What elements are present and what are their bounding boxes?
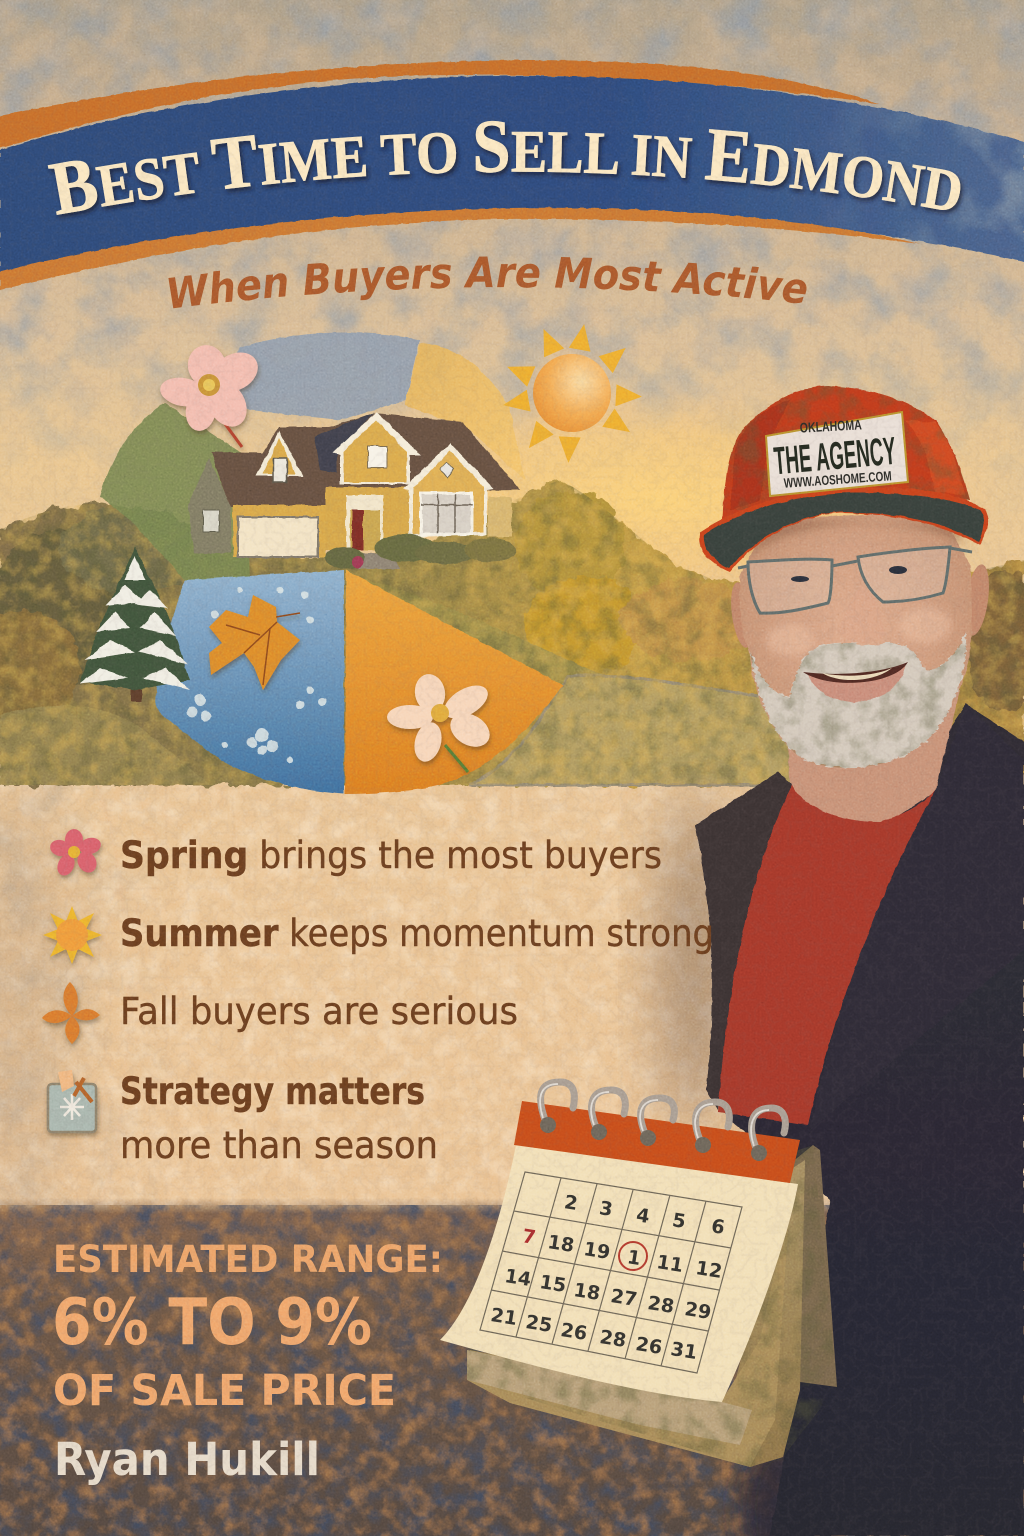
Strategy bullet: Strategy matters [120,1070,425,1113]
hat licence plate: THE AGENCY [772,430,898,483]
Strategy bullet second line: more than season [120,1124,438,1167]
house left wing [188,458,231,553]
house main roof [211,413,520,507]
calendar dates: 19 [582,1238,612,1264]
calendar dates: 25 [524,1311,554,1337]
house dark roof [314,412,374,473]
icon: fall leaf [42,982,100,1044]
calendar dates: 18 [546,1231,576,1257]
summer flower [387,672,496,772]
nose [838,585,885,643]
calendar dates: 26 [559,1319,589,1345]
neck [786,690,960,828]
calendar red header [514,1101,800,1183]
calendar dates: 28 [646,1292,676,1318]
snowy pine tree [80,547,190,702]
wheel quadrant: winter blue [155,570,344,794]
calendar dates [489,1191,726,1364]
jacket [695,704,1024,1536]
calendar dates: 28 [598,1326,628,1352]
banner top orange brush stroke [0,60,880,148]
house right gable [403,443,494,537]
calendar dates: 2 [563,1191,579,1215]
spring flower [158,341,265,447]
calendar circled date [619,1242,647,1270]
jacket left lapel [695,772,792,1110]
house centre gable [333,412,421,484]
cheek highlights [766,607,951,656]
beard [749,632,968,768]
range value: 6% TO 9% [52,1286,372,1360]
calendar dates: 15 [538,1271,568,1297]
shrubs [325,534,516,569]
plate text: website: WWW.AOSHOME.COM [783,468,892,491]
landscape scene [0,322,1024,794]
banner lower orange brush stroke [0,208,920,290]
calendar dates: 5 [671,1209,687,1233]
house entry wall [325,487,415,550]
shadow halo behind person [660,790,730,1130]
wheel quadrant: fall orange [345,570,563,794]
banner blue band [0,75,1024,272]
range unit: OF SALE PRICE [53,1366,396,1416]
house [188,412,520,569]
calendar dates: 1 [626,1246,642,1270]
seasonal bullet list [42,829,714,1167]
brim shadow on forehead [745,518,965,560]
hat crown [722,386,970,519]
icon: strategy tablet [48,1070,96,1132]
person [695,380,1024,1536]
calendar dates: 12 [694,1257,724,1283]
calendar spiral rings [540,1082,785,1161]
calendar dates: 6 [710,1215,726,1239]
house left dormer [256,431,303,482]
plate text: Oklahoma: OKLAHOMA [799,416,862,436]
sun [501,322,642,463]
calendar dates: 3 [598,1197,614,1221]
wheel quadrant: summer yellow [405,343,525,480]
face [740,510,972,768]
tree line and hills [0,470,1024,790]
calendar dates: 14 [503,1265,533,1291]
title banner [0,60,1024,290]
calendar dates: 31 [669,1338,699,1364]
sunset sky glow [320,390,1000,610]
subtitle: When Buyers Are Most Active [168,256,806,308]
wheel quadrant: sky [205,332,420,420]
estimated range block [52,1238,443,1486]
calendar back pages [460,1140,845,1480]
dark fade at jacket base [740,1440,820,1536]
calendar dates: 4 [635,1204,651,1228]
Spring bullet: Spring brings the most buyers [120,834,662,877]
Fall bullet: Fall buyers are serious [120,990,518,1033]
Summer bullet: Summer keeps momentum strong [120,912,714,955]
eyes [791,566,907,582]
house garage door [238,517,318,557]
house right extension [488,497,512,537]
wheel quadrant: spring green [100,403,250,580]
house garage wall [233,505,326,557]
calendar top page [440,1145,798,1402]
icon: summer sun [43,906,102,964]
calendar dates: 29 [683,1298,713,1324]
fall maple leaf [209,595,300,690]
title text: BEST TIME TO SELL IN EDMOND [48,120,965,220]
calendar dates: 21 [489,1304,519,1330]
calendar [440,1082,845,1480]
calendar dates: 18 [572,1279,602,1305]
hat brim [699,487,988,572]
ears [728,563,993,649]
glasses [738,547,972,613]
snowflakes [187,587,326,763]
lower lip skin [808,664,906,702]
house porch and door [346,495,383,550]
jacket lapel [810,704,1024,1130]
grassy mounds [0,575,790,785]
calendar dates: 27 [609,1285,639,1311]
hat licence plate [766,412,908,496]
red shirt [718,785,936,1125]
calendar dates: 26 [634,1333,664,1359]
range heading: ESTIMATED RANGE: [53,1238,443,1281]
mouth [803,662,908,683]
calendar dates: 11 [655,1251,685,1277]
author name: Ryan Hukill [54,1433,320,1486]
calendar grid [480,1172,742,1373]
calendar dates: 7 [521,1225,537,1249]
icon: spring flower [48,829,103,878]
steps [358,553,400,569]
